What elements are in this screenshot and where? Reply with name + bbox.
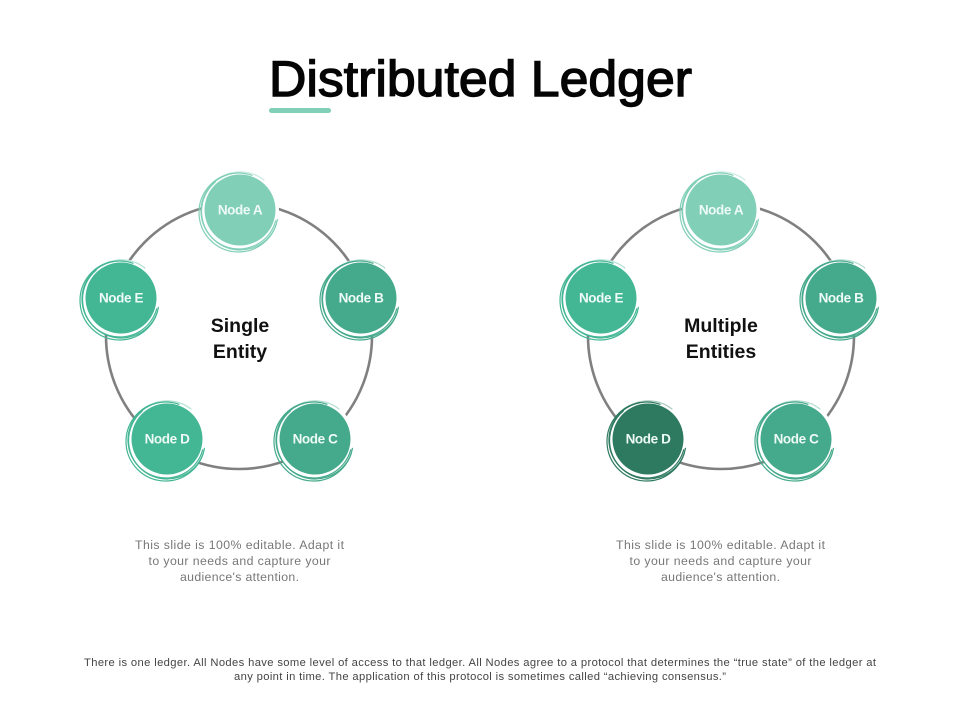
node B: Node B xyxy=(339,290,384,306)
diagram: multiple entities xyxy=(560,171,880,481)
footer note: There is one ledger. All Nodes have some level of access to that ledger. All Nodes agree to a protocol that determines the “true state” of the ledger at xyxy=(84,657,877,669)
node D xyxy=(607,400,687,481)
node C xyxy=(274,400,354,481)
node D: Node D xyxy=(145,432,190,446)
diagram: single entity xyxy=(80,171,400,481)
left description: to your needs and capture your xyxy=(148,554,330,568)
node C: Node C xyxy=(774,432,819,446)
node B xyxy=(800,259,880,340)
connecting ring xyxy=(106,203,372,469)
node E: Node E xyxy=(579,290,623,306)
node D xyxy=(126,400,206,481)
node A xyxy=(680,171,760,252)
node B: Node B xyxy=(819,290,864,306)
node A: Node A xyxy=(699,202,744,218)
node C: Node C xyxy=(293,432,338,446)
node D: Node D xyxy=(626,432,671,446)
node A xyxy=(199,171,279,252)
title underline xyxy=(269,108,331,113)
node A: Node A xyxy=(218,202,263,218)
node E xyxy=(80,259,160,340)
node C xyxy=(755,400,835,481)
left description: audience's attention. xyxy=(180,570,299,584)
right description: to your needs and capture your xyxy=(630,554,812,568)
center label: Entities xyxy=(686,341,756,363)
right description: This slide is 100% editable. Adapt it xyxy=(616,538,826,552)
left description: This slide is 100% editable. Adapt it xyxy=(135,538,345,552)
title: Distributed Ledger xyxy=(269,51,692,107)
node E xyxy=(560,259,640,340)
node B xyxy=(320,259,400,340)
connecting ring xyxy=(588,203,854,469)
center label: Single xyxy=(211,315,269,337)
center label: Entity xyxy=(213,341,267,363)
node E: Node E xyxy=(99,290,143,306)
right description: audience's attention. xyxy=(661,570,780,584)
footer note: any point in time. The application of this protocol is sometimes called “achieving consensus.” xyxy=(234,671,726,683)
center label: Multiple xyxy=(684,315,758,337)
